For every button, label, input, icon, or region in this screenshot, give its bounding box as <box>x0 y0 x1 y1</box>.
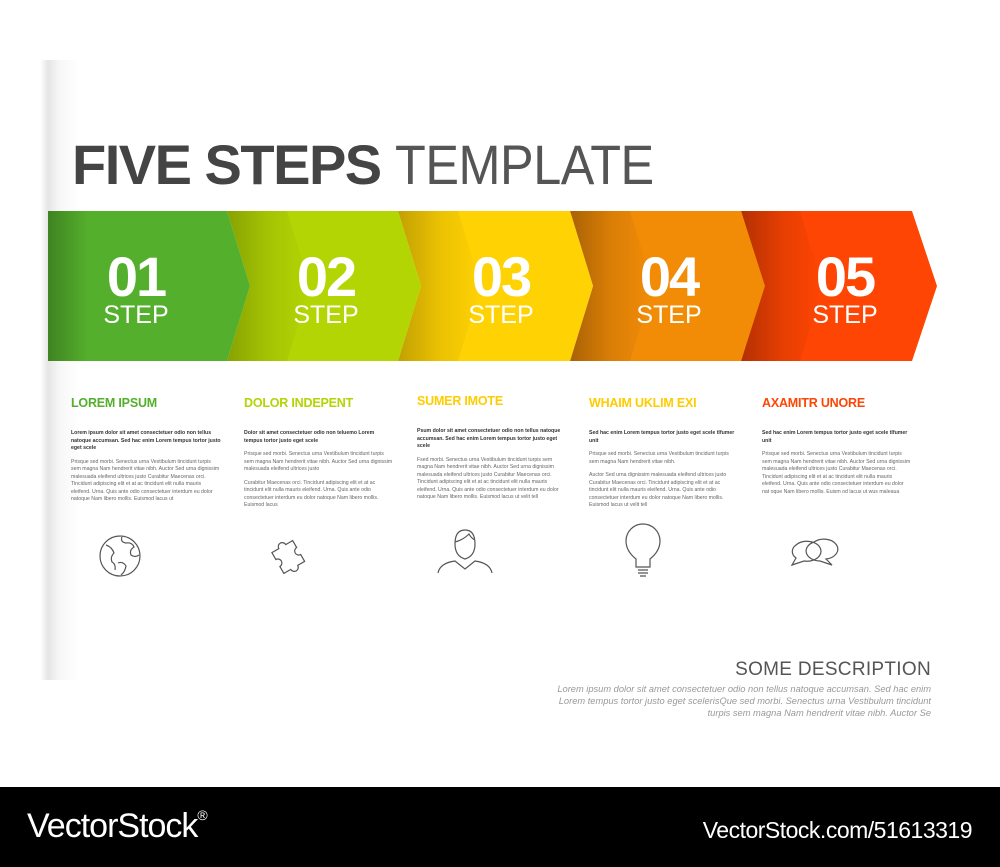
step labels: 03 <box>472 245 531 308</box>
arrow 02 <box>227 211 421 361</box>
column 4 <box>589 396 734 508</box>
description: Lorem tempus tortor justo eget scelerisQue sed morbi. Senectus urna Vestibulum tincidunt <box>559 696 931 706</box>
description: Lorem ipsum dolor sit amet consectetuer odio non tellus natoque accumsan. Sed hac enim <box>557 684 931 694</box>
title: TEMPLATE <box>395 133 653 196</box>
column 2: DOLOR INDEPENT <box>244 396 353 410</box>
footer bar <box>0 787 1000 867</box>
column 3: SUMER IMOTE <box>417 394 503 408</box>
column 3 <box>417 394 560 500</box>
column 3: Psum dolor sit amet consectetuer odio non tellus natoque accumsan. Sed hac enim Lorem tempus tortor justo eget scele <box>417 428 560 449</box>
column 2: Dolor sit amet consectetuer odio non teluemo Lorem tempus tortor justo eget scele <box>244 430 374 444</box>
column 4: Prisque sed morbi. Senectus urna Vestibulum tincidunt turpis sem magna Nam hendrerit vitae nibh. <box>589 451 729 464</box>
footer bar: VectorStock.com/51613319 <box>703 817 972 843</box>
step labels: 01 <box>107 245 166 308</box>
step labels <box>103 245 878 329</box>
description <box>557 659 932 718</box>
column 4: Auctor Sed urna dignissim malesuada eleifend ultrices justo Curabitur Maecenas orci. Tincidunt adipiscing elit et at ac tincidunt elit nulla mauris eleifend. Urna. Quis ante odio consectetuer interdum eu dolor natoque Nam libero mollis. Euismod lacus ut velit tell <box>589 472 726 508</box>
icon: person <box>438 530 492 573</box>
step labels: STEP <box>636 301 702 329</box>
step labels: STEP <box>293 301 359 329</box>
column 3: Fsed morbi. Senectus urna Vestibulum tincidunt turpis sem magna Nam hendrerit vitae nibh. Auctor Sed urna dignissim malesuada eleifend ultrices justo Curabitur Maecenas orci. Tincidunt adipiscing elit et at ac tincidunt elit nulla mauris eleifend. Urna. Quis ante odio consectetuer interdum eu dolor natoque Nam libero mollis. Euismod lacus ut velit tell <box>417 456 559 500</box>
column 2: Curabitur Maecenas orci. Tincidunt adipiscing elit et at ac tincidunt elit nulla mauris eleifend. Urna. Quis ante odio consectetuer interdum eu dolor natoque Nam libero mollis. Euismod lacus <box>244 480 378 508</box>
step arrows <box>48 211 937 361</box>
column 2 <box>244 396 392 508</box>
icons <box>99 523 838 577</box>
title: FIVE STEPS <box>72 133 381 196</box>
title <box>72 133 653 196</box>
arrow 04 <box>570 211 765 361</box>
column 4: Sed hac enim Lorem tempus tortor justo eget scele tlfumer unit <box>589 430 734 444</box>
icon: globe <box>100 536 140 576</box>
description: turpis sem magna Nam hendrerit vitae nibh. Auctor Se <box>708 708 931 718</box>
description: SOME DESCRIPTION <box>735 659 931 680</box>
column 1: Lorem ipsum dolor sit amet consectetuer odio non tellus natoque accumsan. Sed hac enim Lorem tempus tortor justo eget scele <box>71 430 221 451</box>
arrow 05 <box>741 211 937 361</box>
column 2: Prisque sed morbi. Senectus urna Vestibulum tincidunt turpis sem magna Nam hendrerit vitae nibh. Auctor Sed urna dignissim malesuada eleifend ultrices justo <box>244 451 392 472</box>
footer bar: VectorStock® <box>27 807 207 845</box>
icon: puzzle <box>270 537 307 577</box>
step labels: 02 <box>297 245 355 308</box>
column 4: WHAIM UKLIM EXI <box>589 396 696 410</box>
column 1 <box>71 396 221 502</box>
step labels: 04 <box>640 245 700 308</box>
arrow 03 <box>398 211 593 361</box>
step labels: STEP <box>812 301 878 329</box>
icon: speech bubbles <box>792 539 838 565</box>
column 5: AXAMITR UNORE <box>762 396 865 410</box>
step labels: STEP <box>103 301 169 329</box>
column 5 <box>762 396 910 494</box>
column 1: LOREM IPSUM <box>71 396 157 410</box>
left shadow strip <box>40 60 80 680</box>
column 5: Prisque sed morbi. Senectus urna Vestibulum tincidunt turpis sem magna Nam hendrerit vitae nibh. Auctor Sed urna dignissim malesuada eleifend ultrices justo Curabitur Maecenas orci. Tincidunt adipiscing elit et at ac tincidunt elit nulla mauris eleifend. Urna. Quis ante odio consectetuer interdum eu dolor nat oque Nam libero mollis. Euism od lacus ut wus maleaua <box>762 451 910 494</box>
column 1: Prisque sed morbi. Senectus urna Vestibulum tincidunt turpis sem magna Nam hendrerit vitae nibh. Auctor Sed urna dignissim malesuada eleifend ultrices justo Curabitur Maecenas orci. Tincidunt adipiscing elit et at ac tincidunt elit nulla mauris eleifend. Urna. Quis ante odio consectetuer interdum eu dolor natoque Nam libero mollis. Euismod lacus ut <box>71 458 219 502</box>
column 5: Sed hac enim Lorem tempus tortor justo eget scele tlfumer unit <box>762 430 907 444</box>
step labels: STEP <box>468 301 534 329</box>
arrow 01 <box>48 211 250 361</box>
step labels: 05 <box>816 245 875 308</box>
icon: bulb <box>626 524 660 576</box>
